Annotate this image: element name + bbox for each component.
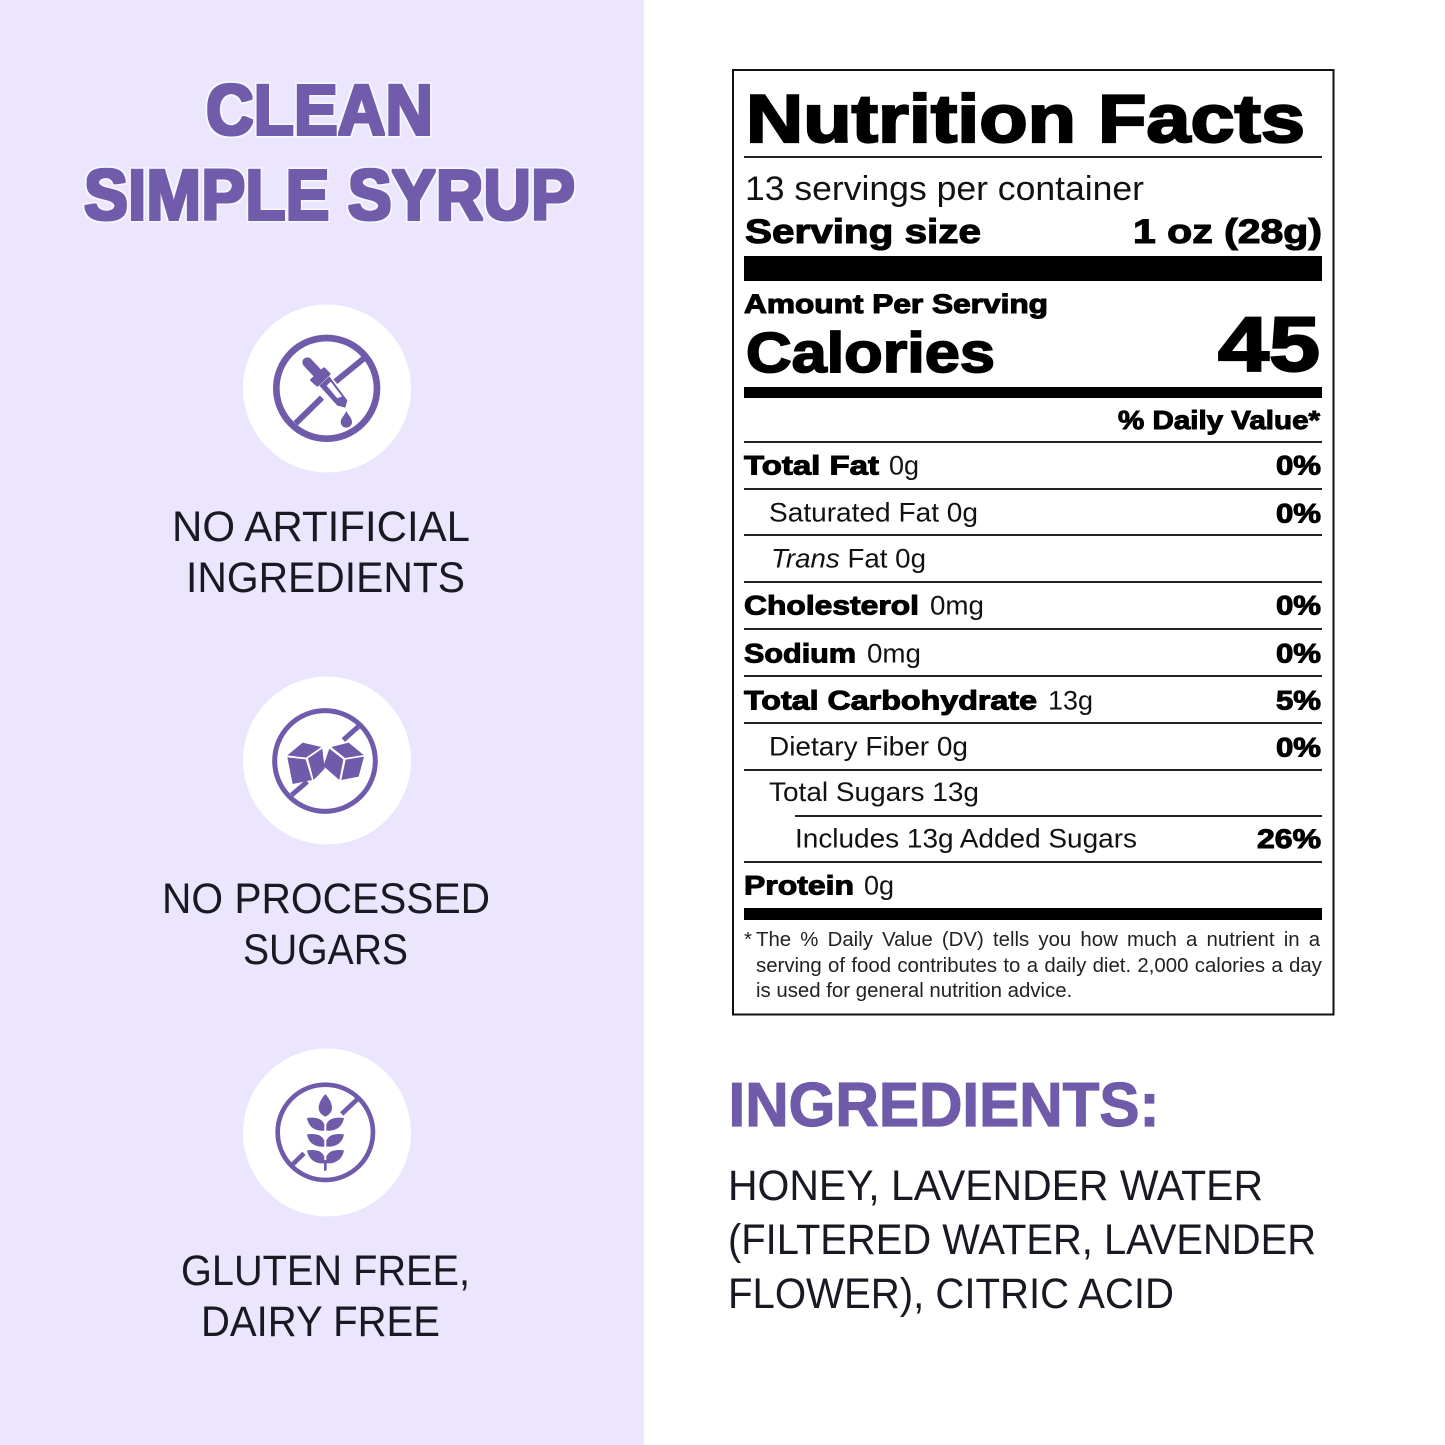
text: no artificial ingredients: NO ARTIFICIAL: [172, 503, 470, 551]
nutrient rows: Includes 13g Added Sugars: [795, 824, 1137, 854]
nutrient rows: 5%: [1276, 685, 1321, 715]
serving information: 13 servings per container: [745, 170, 1144, 208]
footnote: is used for general nutrition advice.: [756, 980, 1072, 1002]
text: gluten free dairy free: [181, 1247, 470, 1346]
calories section: Calories: [746, 321, 995, 385]
calories section: 45: [1218, 302, 1320, 388]
nutrient rows: Trans Fat 0g: [771, 543, 926, 573]
text: no artificial ingredients: [172, 503, 470, 602]
panel: nutrition facts label: [733, 70, 1334, 1014]
heading: nutrition facts: Nutrition Facts: [746, 81, 1305, 157]
nutrient rows: 0%: [1276, 590, 1321, 620]
footnote: serving of food contributes to a daily diet. 2,000 calories a day: [756, 955, 1323, 977]
text: gluten free dairy free: GLUTEN FREE,: [181, 1247, 470, 1295]
nutrient rows: 0mg: [930, 590, 984, 620]
nutrient rows: 0%: [1276, 499, 1321, 529]
nutrient rows: 26%: [1257, 824, 1321, 854]
icon: no processed sugars cubes: [243, 676, 411, 844]
nutrient rows: Total Sugars 13g: [769, 777, 979, 807]
serving information: Serving size: [745, 213, 981, 251]
serving information: [744, 156, 1322, 281]
nutrient rows: 0mg: [867, 639, 921, 669]
ingredients list: FLOWER), CITRIC ACID: [728, 1270, 1174, 1318]
ingredients list: [728, 1162, 1316, 1318]
nutrient rows: Total Fat: [744, 451, 879, 481]
ingredients list: HONEY, LAVENDER WATER: [728, 1162, 1263, 1210]
icon: gluten free wheat: [243, 1048, 411, 1216]
nutrient rows: 13g: [1048, 685, 1093, 715]
ingredients list: (FILTERED WATER, LAVENDER: [728, 1216, 1316, 1264]
calories section: Amount Per Serving: [744, 289, 1048, 319]
title: clean simple syrup: [84, 72, 575, 236]
nutrient rows: 0g: [864, 870, 894, 900]
nutrient rows: Total Carbohydrate: [744, 685, 1037, 715]
footnote: *: [744, 929, 752, 951]
footnote: [744, 929, 1323, 1002]
footnote: The % Daily Value (DV) tells you how much a nutrient in a: [756, 929, 1321, 951]
title: clean simple syrup: CLEAN: [206, 72, 433, 150]
text: no processed sugars: NO PROCESSED: [162, 875, 490, 923]
nutrient rows: 0g: [889, 451, 919, 481]
heading: ingredients: INGREDIENTS:: [728, 1071, 1160, 1140]
nutrient rows: Sodium: [744, 639, 856, 669]
calories section: [744, 289, 1322, 435]
text: no processed sugars: SUGARS: [243, 926, 408, 974]
nutrient rows: Dietary Fiber 0g: [769, 731, 968, 761]
calories section: % Daily Value*: [1118, 405, 1321, 435]
text: gluten free dairy free: DAIRY FREE: [201, 1298, 440, 1346]
serving information: 1 oz (28g): [1133, 213, 1322, 251]
nutrient rows: Saturated Fat 0g: [769, 498, 978, 528]
nutrient rows: 0%: [1276, 732, 1321, 762]
nutrient rows: 0%: [1276, 639, 1321, 669]
nutrient rows: Cholesterol: [744, 590, 919, 620]
nutrient rows: 0%: [1276, 451, 1321, 481]
icon: no artificial ingredients dropper: [243, 304, 411, 472]
text: no processed sugars: [162, 875, 490, 974]
nutrient rows: [744, 441, 1322, 920]
text: no artificial ingredients: INGREDIENTS: [186, 554, 465, 602]
title: clean simple syrup: SIMPLE SYRUP: [84, 156, 575, 236]
nutrient rows: Protein: [744, 870, 854, 900]
panel: left lavender column: [0, 0, 644, 1445]
